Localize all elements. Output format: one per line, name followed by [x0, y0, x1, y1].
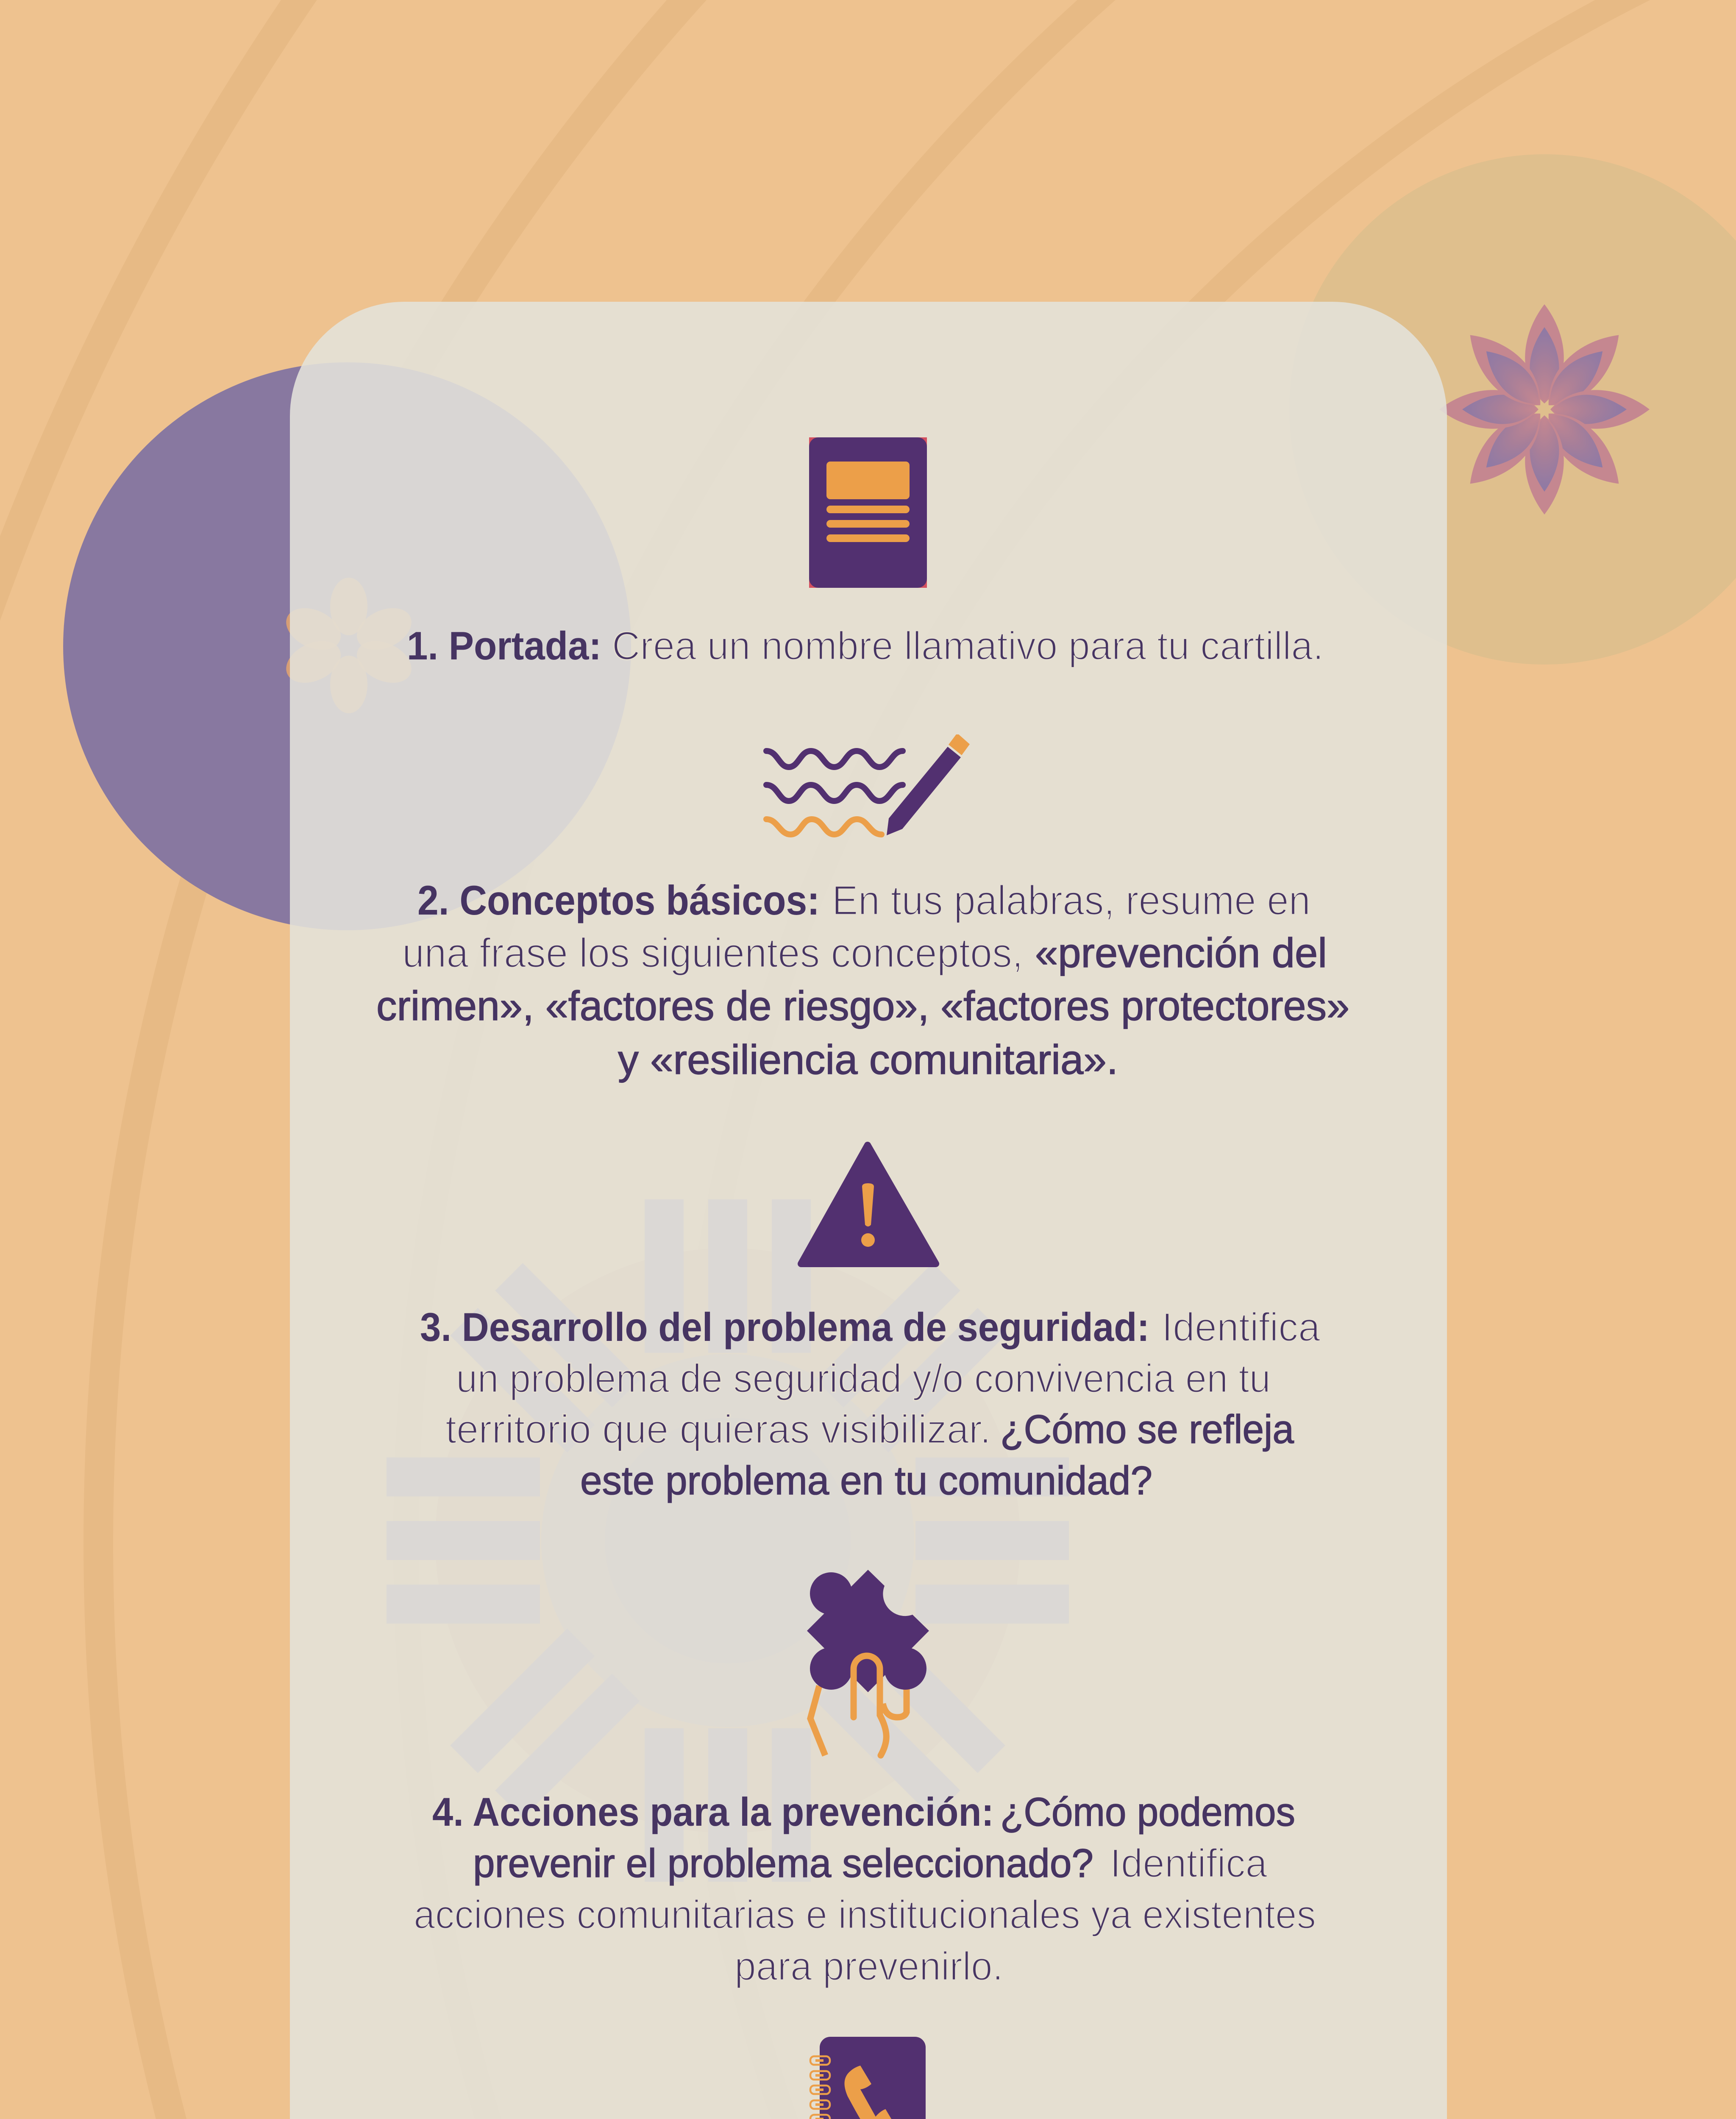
text: step 1: 1. Portada:	[407, 623, 601, 668]
text: step 2: crimen», «factores de riesgo», «factores protectores»	[376, 982, 1349, 1029]
text: step 4: ¿Cómo podemos	[1000, 1790, 1295, 1835]
text: step 1: Crea un nombre llamativo para tu cartilla.	[612, 623, 1324, 668]
circle: top right tan	[1289, 154, 1736, 665]
flower: left ghost	[279, 578, 418, 713]
text: step 2: y «resiliencia comunitaria».	[618, 1036, 1118, 1083]
icon: cover booklet	[809, 437, 927, 588]
circle: left purple	[63, 362, 631, 930]
text: step 3: 3. Desarrollo del problema de seguridad:	[420, 1305, 1149, 1350]
text: step 4: Identifica	[1110, 1841, 1267, 1886]
icon: warning triangle	[801, 1145, 936, 1264]
text: step 3: territorio que quieras visibilizar.	[445, 1407, 991, 1452]
text: step 2: En tus palabras, resume en	[832, 877, 1310, 923]
text: step 4: prevenir el problema seleccionado?	[473, 1841, 1093, 1886]
panel: translucent card	[290, 302, 1447, 2119]
text: step 3: un problema de seguridad y/o convivencia en tu	[456, 1356, 1271, 1401]
text: step 4	[414, 1790, 1316, 1989]
text: step 2: «prevención del	[1035, 929, 1327, 976]
sunburst emblem behind panel	[245, 1058, 1210, 2023]
text: step 2	[376, 877, 1349, 1083]
text: step 4: acciones comunitarias e institucionales ya existentes	[414, 1892, 1316, 1937]
text: step 3	[420, 1305, 1320, 1503]
icon: phone directory notebook	[810, 2037, 926, 2119]
text: step 4: 4. Acciones para la prevención:	[432, 1790, 994, 1835]
icon: writing pencil	[766, 734, 970, 835]
text: step 2: una frase los siguientes conceptos,	[402, 929, 1023, 976]
icon: puzzle piece held by hand	[807, 1570, 929, 1755]
flower: top right	[1439, 304, 1650, 514]
text: step 2: 2. Conceptos básicos:	[417, 877, 820, 923]
text: step 3: ¿Cómo se refleja	[1000, 1407, 1294, 1452]
text: step 3: Identifica	[1162, 1305, 1320, 1350]
text: step 4: para prevenirlo.	[734, 1944, 1003, 1989]
text: step 3: este problema en tu comunidad?	[580, 1458, 1152, 1503]
